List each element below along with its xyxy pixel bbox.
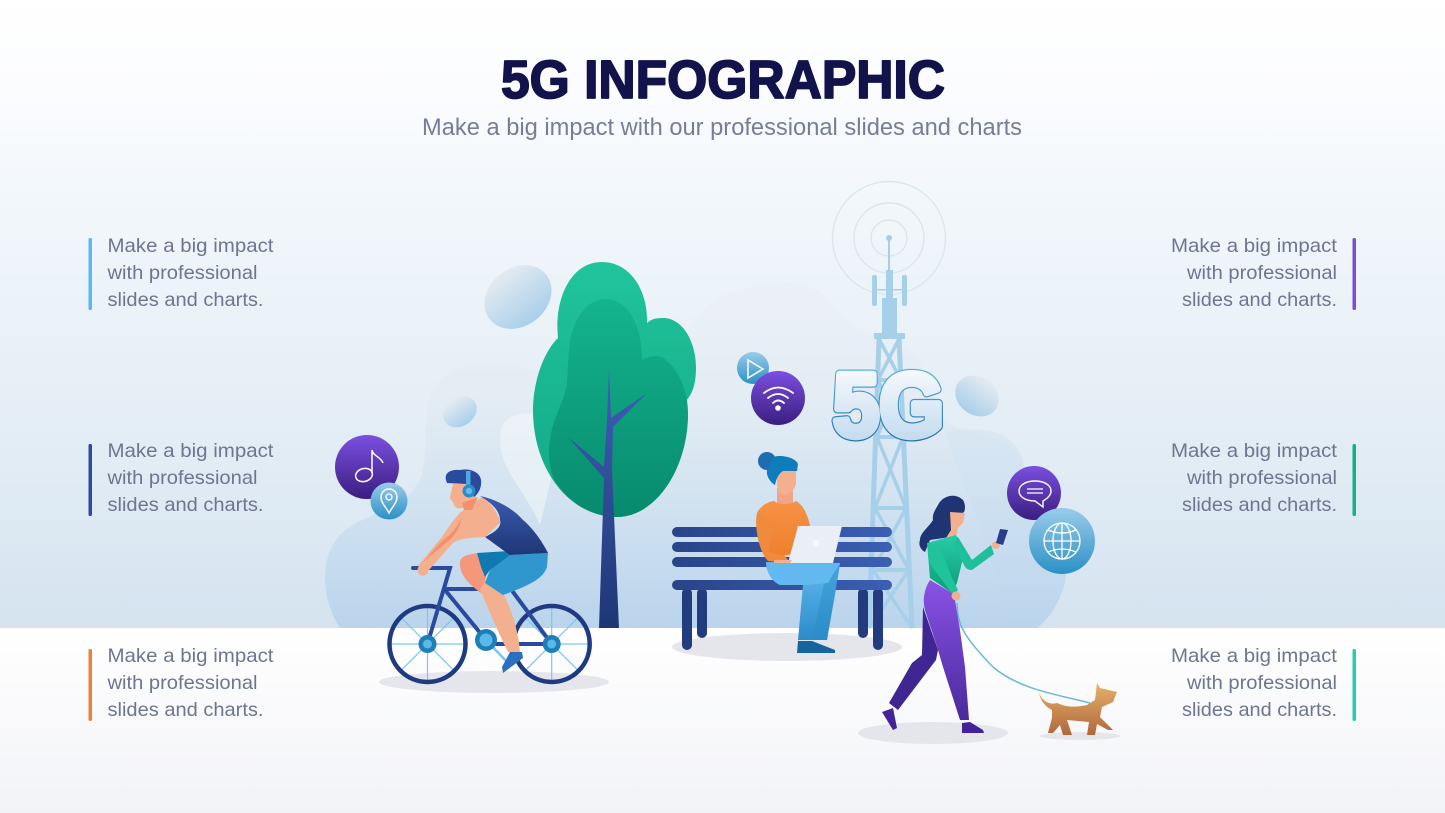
hair <box>919 496 965 552</box>
tree <box>533 262 696 628</box>
text block: right bottom <box>1171 645 1356 721</box>
text block: right bottom: with professional <box>1186 672 1337 694</box>
arms <box>953 537 994 570</box>
background hills <box>325 282 1066 628</box>
text block: right middle: slides and charts. <box>1182 494 1337 516</box>
text block: left bottom: with professional <box>106 672 258 694</box>
text block: left middle <box>88 440 274 516</box>
leash <box>957 603 1090 703</box>
text block: left top: Make a big impact <box>108 235 274 257</box>
icon: location pin <box>370 482 408 520</box>
decorative drops <box>437 252 1007 434</box>
phone <box>996 529 1008 545</box>
shadows <box>379 633 1120 744</box>
back leg <box>889 607 938 710</box>
icon: globe <box>1029 508 1095 574</box>
text block: left top: slides and charts. <box>108 289 264 311</box>
signal tower <box>832 182 946 628</box>
text block: left bottom: slides and charts. <box>108 699 264 721</box>
text block: right bottom: Make a big impact <box>1171 645 1338 667</box>
icon: music note <box>335 435 399 499</box>
text block: right bottom: slides and charts. <box>1182 699 1337 721</box>
text block: left bottom: Make a big impact <box>108 645 274 667</box>
torso <box>927 535 965 593</box>
title: 5G INFOGRAPHIC <box>501 50 945 110</box>
text block: right middle: with professional <box>1186 467 1337 489</box>
bicycle <box>390 568 590 682</box>
text block: left middle: with professional <box>106 467 258 489</box>
icon: wifi <box>751 371 805 425</box>
text block: right top: with professional <box>1186 262 1337 284</box>
text block: left top: with professional <box>106 262 258 284</box>
icon: chat bubble <box>1007 466 1061 520</box>
text block: right middle <box>1171 440 1356 516</box>
text block: left bottom <box>88 645 274 721</box>
bench <box>672 527 892 650</box>
shoes <box>882 708 984 733</box>
woman walking dog <box>882 496 1090 733</box>
text block: left top <box>88 235 274 311</box>
text block: right top: Make a big impact <box>1171 235 1338 257</box>
rider <box>418 469 548 673</box>
text block: left middle: Make a big impact <box>108 440 274 462</box>
text block: right middle: Make a big impact <box>1171 440 1338 462</box>
background sky <box>0 0 1445 628</box>
face <box>946 512 965 538</box>
front leg <box>924 580 969 720</box>
text block: left middle: slides and charts. <box>108 494 264 516</box>
text block: right top: slides and charts. <box>1182 289 1337 311</box>
dog <box>1039 683 1117 735</box>
5G label: 5G <box>833 356 944 456</box>
ground <box>0 628 1445 813</box>
5G label: 5G <box>833 356 944 456</box>
subtitle: Make a big impact with our professional slides and charts <box>422 114 1022 141</box>
icon: play <box>737 352 769 384</box>
woman on bench with laptop <box>756 452 842 653</box>
text block: right top <box>1171 235 1356 311</box>
cyclist <box>390 469 590 682</box>
